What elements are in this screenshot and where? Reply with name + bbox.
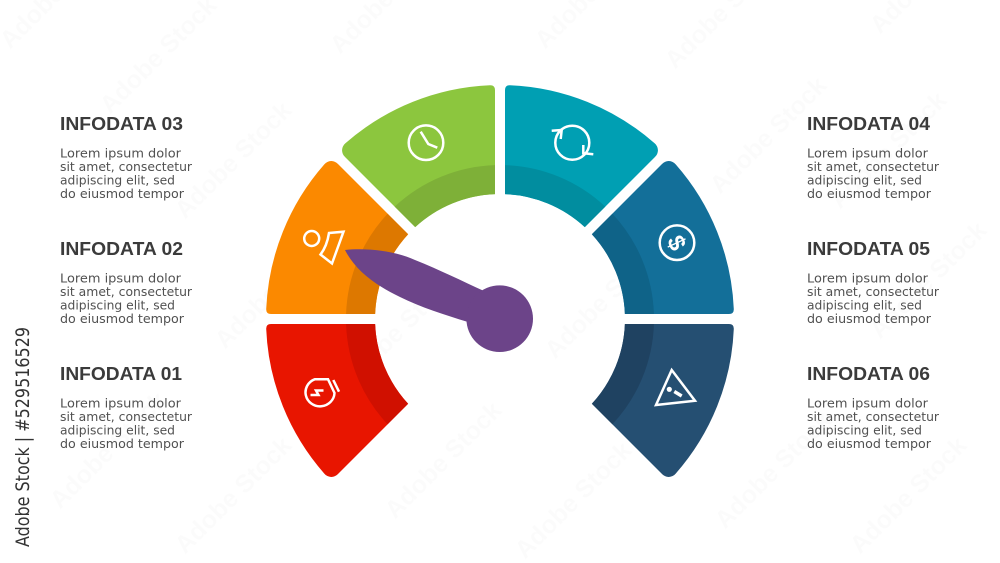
text block: infodata 04: sit amet, consectetur [807,159,940,174]
text block: infodata 05: INFODATA 05 [807,238,930,259]
text block: infodata 02: sit amet, consectetur [60,284,193,299]
text block: infodata 05 [807,238,940,326]
text block: infodata 01: sit amet, consectetur [60,409,193,424]
text block: infodata 03: adipiscing elit, sed [60,172,175,188]
text block: infodata 05: adipiscing elit, sed [807,298,922,312]
icon: circle and shape [304,231,344,264]
segment 05: blue [592,161,734,314]
text block: infodata 06: INFODATA 06 [807,363,930,384]
text block: infodata 04: adipiscing elit, sed [807,172,922,188]
text block: infodata 04: INFODATA 04 [807,113,931,134]
text block: infodata 02 [60,238,193,326]
text block: infodata 02: Lorem ipsum dolor [60,270,182,286]
text: Adobe Stock [539,236,667,364]
text block: infodata 01: do eiusmod tempor [60,436,185,451]
text block: infodata 01: INFODATA 01 [60,363,182,384]
text: Adobe Stock [209,226,337,354]
segment 02: orange [266,161,408,314]
text: Adobe Stock [709,406,837,534]
text block: infodata 01: Lorem ipsum dolor [60,396,182,410]
icon: dollar coin: $ [661,231,691,255]
icon: warning triangle [656,370,695,405]
segment 04: teal [505,85,658,227]
gauge needle [345,249,533,352]
text block: infodata 03: INFODATA 03 [60,113,183,134]
text block: infodata 03: Lorem ipsum dolor [60,146,182,160]
segment 01: red [266,324,408,477]
text block: infodata 03: sit amet, consectetur [60,159,193,174]
text block: infodata 02: adipiscing elit, sed [60,298,175,312]
text block: infodata 05: do eiusmod tempor [807,311,932,326]
icon: refresh arrows [552,126,593,160]
text: Adobe Stock [44,386,172,514]
text: Adobe Stock [844,431,972,559]
text: Adobe Stock [379,396,507,524]
text block: infodata 04: Lorem ipsum dolor [807,146,929,160]
text block: infodata 02: do eiusmod tempor [60,311,185,326]
text block: infodata 06: Lorem ipsum dolor [807,396,929,410]
text: Adobe Stock [334,266,462,394]
text: Adobe Stock [824,86,952,214]
segment 03: green [342,85,495,227]
text block: infodata 02: INFODATA 02 [60,238,183,259]
text block: infodata 05: Lorem ipsum dolor [807,270,929,286]
icon: clock [409,125,443,160]
text block: infodata 01: adipiscing elit, sed [60,422,175,438]
text: Adobe Stock [169,96,297,224]
text block: infodata 04 [807,113,940,201]
text block: infodata 01 [60,363,193,451]
text block: infodata 03: do eiusmod tempor [60,186,185,201]
text: Adobe Stock [169,431,297,559]
icon: lightning shield [306,379,339,406]
segment 06: navy [592,324,734,477]
text block: infodata 04: do eiusmod tempor [807,186,932,201]
text block: infodata 03 [60,113,193,201]
watermark: stock id: Adobe Stock | #529516529 [12,327,34,547]
text block: infodata 06: do eiusmod tempor [807,436,932,451]
text block: infodata 06: sit amet, consectetur [807,409,940,424]
text: Adobe Stock [704,71,832,199]
text block: infodata 06 [807,363,940,451]
text block: infodata 06: adipiscing elit, sed [807,422,922,438]
text: Adobe Stock [509,436,637,563]
text: Adobe Stock [864,216,992,344]
icon: dollar coin [660,225,694,260]
text block: infodata 05: sit amet, consectetur [807,284,940,299]
